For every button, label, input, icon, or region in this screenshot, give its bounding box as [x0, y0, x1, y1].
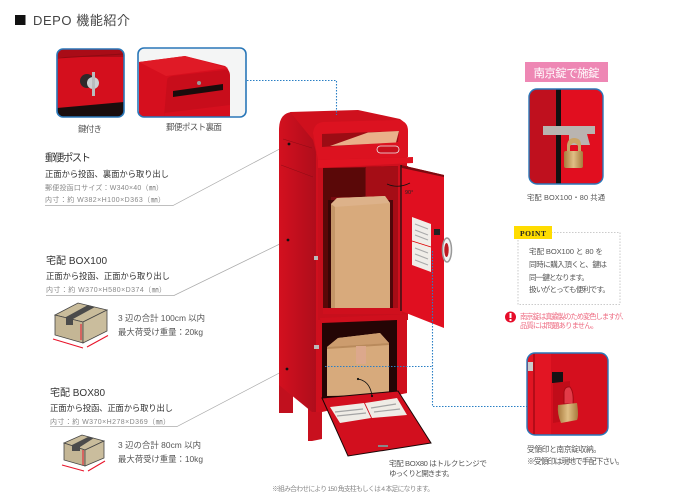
caption: lock storage: 受領印と南京錠収納。 — [527, 444, 601, 454]
mailbox product illustration — [279, 110, 452, 456]
text block: BOX100 size — [118, 313, 205, 337]
dotted connector: post back to mailbox — [247, 80, 336, 115]
heading: padlock: 南京錠で施錠 — [534, 66, 600, 80]
text block: BOX80 size: 最大荷受け重量：10kg — [118, 454, 203, 464]
warning note — [505, 312, 628, 330]
text block: BOX80: 内寸：約 W370×H278×D369（㎜） — [50, 417, 170, 426]
text block: BOX100 — [46, 255, 170, 294]
photo: post back side — [138, 48, 246, 117]
roof and hood — [290, 110, 413, 168]
caption: padlock: 宅配 BOX100・80 共通 — [527, 193, 606, 202]
icon: box 80 — [62, 435, 105, 471]
caption: lock storage: ※受領印は現地で手配下さい。 — [527, 456, 624, 466]
point box: POINT — [520, 229, 546, 238]
photo: key lock — [57, 49, 124, 117]
photo: lock storage — [527, 353, 608, 435]
frame strip — [318, 166, 408, 320]
BOX100 compartment — [323, 166, 398, 308]
open door: 90° — [405, 190, 413, 196]
text block: BOX100: 内寸：約 W370×H580×D374（㎜） — [46, 285, 166, 294]
text block: BOX80 size: 3 辺の合計 80cm 以内 — [118, 440, 201, 450]
text block: post — [45, 151, 169, 204]
side panel seams and rivets — [281, 139, 319, 370]
warning note: 南京錠は真鍮製のため変色しますが、 — [520, 312, 628, 321]
caption: post back side: 郵便ポスト裏面 — [166, 122, 222, 132]
point box: 宅配 BOX100 と 80 を — [529, 247, 603, 256]
text block: BOX80 — [50, 387, 173, 426]
warning note: 品質には問題ありません。 — [520, 321, 598, 330]
caption: key lock: 鍵付き — [78, 124, 102, 134]
side panel — [279, 112, 318, 412]
caption: torque hinge: ゆっくりと開きます。 — [389, 469, 454, 478]
caption: torque hinge: 宅配 BOX80 はトルクヒンジで — [389, 459, 487, 468]
title: DEPO 機能紹介 — [33, 13, 130, 28]
point box: 扱いがとっても便利です。 — [529, 284, 610, 294]
fold-down door — [322, 378, 431, 456]
photo: padlock — [529, 89, 603, 184]
leader line: BOX80 — [50, 369, 287, 426]
BOX80 compartment — [320, 314, 407, 400]
parcel — [331, 196, 390, 308]
footnote: ※組み合わせにより 150 角支柱もしくは 4 本足になります。 — [272, 484, 434, 493]
text block: BOX100: 正面から投函、正面から取り出し — [46, 271, 170, 281]
icon: box 100 — [53, 303, 108, 348]
caption: torque hinge — [389, 459, 487, 478]
dotted connector: lock storage to mailbox — [325, 251, 527, 406]
text block: BOX100 size: 最大荷受け重量：20kg — [118, 327, 203, 337]
heading: padlock — [525, 62, 608, 82]
text block: post: 内寸：約 W382×H100×D363（㎜） — [45, 195, 165, 204]
text block: BOX80: 正面から投函、正面から取り出し — [50, 403, 173, 413]
leader line: BOX100 — [46, 240, 288, 296]
text block: post: 郵便投函口サイズ：W340×40（㎜） — [45, 183, 163, 192]
text block: post: 正面から投函、裏面から取り出し — [45, 169, 169, 179]
legs — [279, 384, 322, 441]
open door — [387, 165, 452, 328]
text block: BOX80: 宅配 BOX80 — [50, 387, 105, 399]
leader line: post — [45, 144, 289, 206]
point box: 同一鍵となります。 — [529, 272, 589, 282]
text block: BOX100: 宅配 BOX100 — [46, 255, 107, 267]
front body — [316, 150, 407, 412]
text block: BOX80 size — [118, 440, 203, 464]
point box — [514, 226, 620, 304]
text block: post: 郵便ポスト — [45, 151, 91, 164]
caption: lock storage — [527, 444, 624, 466]
text block: BOX100 size: 3 辺の合計 100cm 以内 — [118, 313, 205, 323]
point box: 同時に購入頂くと、鍵は — [529, 259, 607, 269]
